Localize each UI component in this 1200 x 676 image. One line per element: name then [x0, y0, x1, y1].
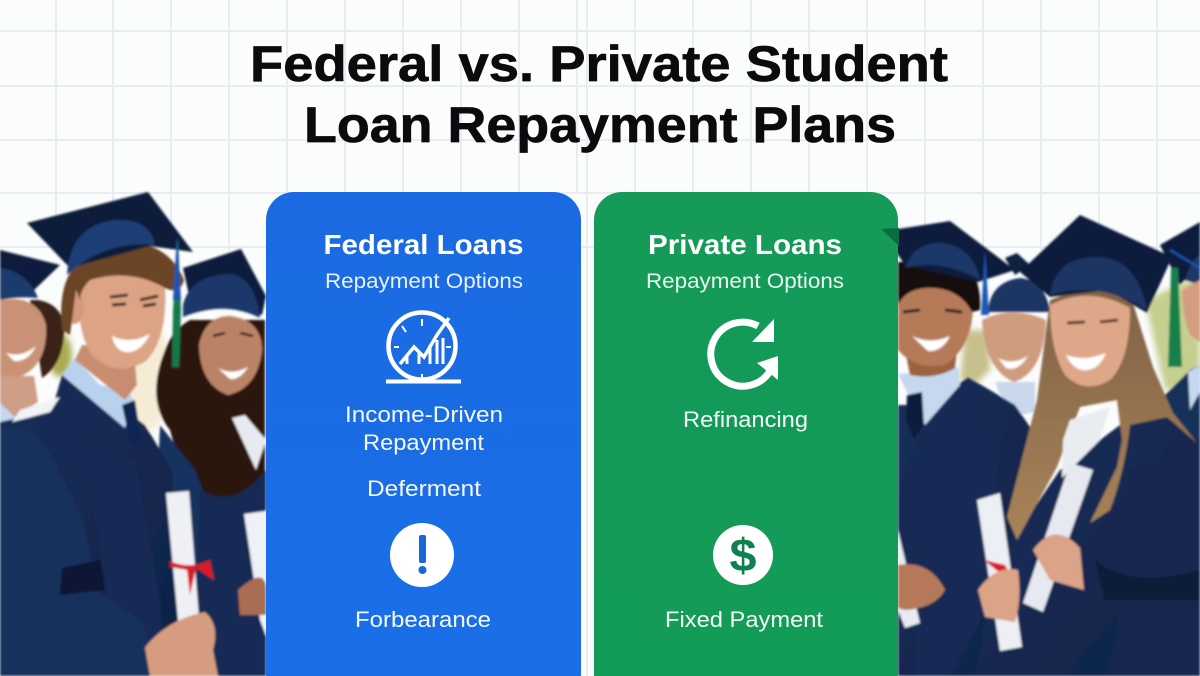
graduate with dark hair: [885, 221, 1032, 676]
icon: exclamation: [390, 523, 454, 587]
label: refinancing: Refinancing: [683, 407, 808, 432]
main graduate cap: [1020, 215, 1172, 313]
graduate far left: [0, 250, 64, 425]
tassel: [172, 236, 181, 367]
subheading: repayment options: Repayment Options: [325, 270, 523, 293]
diploma scroll with ribbon, right: [977, 493, 1022, 651]
main graduate collar: [1062, 407, 1110, 478]
tassel right: [1168, 268, 1182, 367]
label: income-driven repayment: Income-Driven: [345, 402, 503, 427]
panel: federal loans: [266, 192, 581, 676]
main graduate hair: [61, 242, 184, 335]
title: Loan Repayment Plans: [304, 97, 896, 153]
label: income-driven repayment: [345, 402, 503, 455]
label: forbearance: Forbearance: [355, 607, 491, 632]
main graduate cap: [27, 192, 193, 268]
main graduate collar and tie: [62, 358, 133, 428]
graduate at far right: [1160, 222, 1200, 445]
main graduate gown on right: [975, 417, 1200, 676]
icon: dollar: [713, 525, 773, 585]
graduate with curly hair on the right of left group: [150, 249, 266, 676]
icon: gauge with chart: [386, 312, 461, 382]
photo: graduates on the left: [0, 192, 266, 676]
hands: [978, 569, 1019, 622]
label: income-driven repayment: Repayment: [363, 430, 485, 455]
label: deferment: Deferment: [367, 476, 482, 501]
background glow behind left graduates: [126, 320, 170, 430]
main graduate long hair: [1007, 285, 1197, 540]
icon: refinancing arrows: [711, 319, 778, 386]
photo: graduates on the right: [885, 215, 1200, 676]
hand: [143, 612, 218, 676]
subheading: repayment options: Repayment Options: [646, 270, 844, 293]
title: [250, 36, 948, 153]
cap tip overlapping the private panel: [881, 228, 899, 246]
label: fixed payment: Fixed Payment: [665, 607, 824, 632]
graduate behind in the middle: [982, 253, 1050, 415]
second diploma scroll: [1023, 463, 1093, 612]
heading: federal loans: Federal Loans: [324, 229, 524, 260]
heading: private loans: Private Loans: [648, 229, 842, 260]
background foliage behind right graduates: [960, 330, 990, 385]
main graduate neck and face: [75, 345, 137, 400]
diploma scroll with ribbon: [166, 491, 203, 673]
main graduate gown: [0, 375, 180, 676]
title: Federal vs. Private Student: [250, 36, 948, 92]
main graduate face: [1050, 296, 1130, 386]
icon: dollar: $: [730, 529, 756, 581]
panel: private loans: [594, 192, 898, 676]
